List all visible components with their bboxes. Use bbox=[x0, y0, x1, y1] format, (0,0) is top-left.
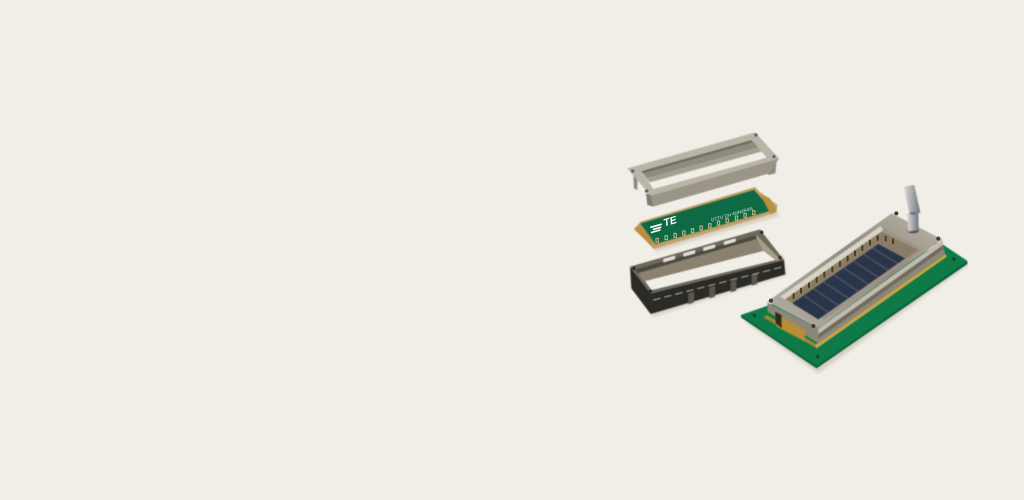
logo: TE bbox=[650, 215, 679, 233]
small card lettering: DTTU DH 4NN4R4N bbox=[711, 206, 753, 223]
part: top metal plate bbox=[767, 213, 942, 328]
exploded parts: left stack bbox=[627, 132, 787, 317]
part: connector body with gold rails bbox=[763, 240, 947, 348]
part: dark blue insulator with ribs bbox=[792, 244, 905, 319]
logo: TE: TE bbox=[662, 215, 679, 229]
contact pads row bbox=[656, 211, 755, 242]
contact pins row bbox=[794, 236, 893, 298]
plate screws bbox=[769, 211, 940, 328]
part: green base board bbox=[741, 242, 967, 368]
part: grey top frame bbox=[627, 132, 779, 207]
part: cavity bbox=[780, 226, 922, 319]
assembled connector on board bbox=[741, 185, 968, 373]
shadow below board bbox=[745, 250, 968, 373]
icon: locking handle bbox=[904, 185, 920, 233]
part: green printed circuit card bbox=[634, 187, 780, 252]
part: metal shield housing bbox=[630, 229, 787, 317]
